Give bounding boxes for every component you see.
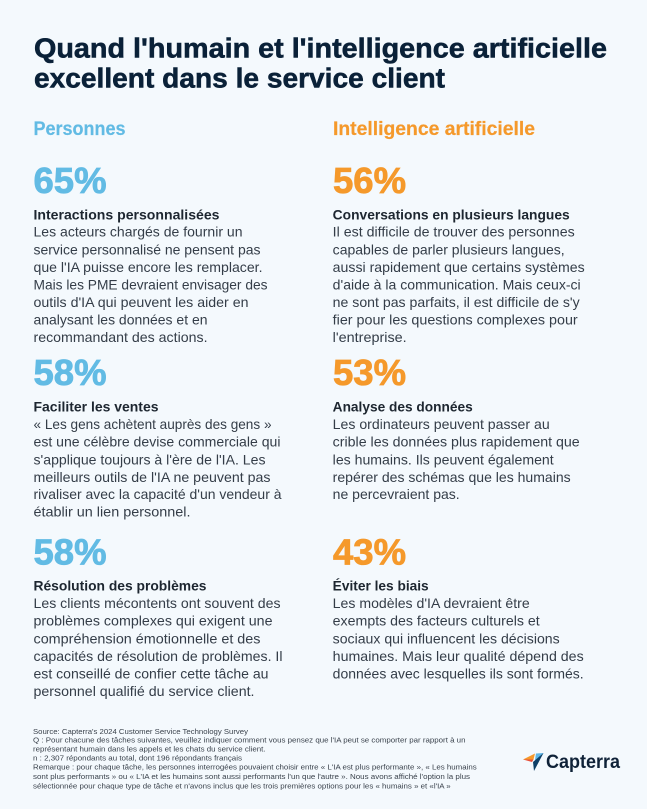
text block: éviter les biais: humaines. Mais leur qualité dépend des bbox=[333, 649, 584, 664]
text block: interactions personnalisées: outils d'IA qui peuvent les aider en bbox=[34, 295, 248, 310]
text block: résolution des problèmes: problèmes complexes qui exigent une bbox=[34, 614, 273, 629]
text block: interactions personnalisées: service personnalisé ne pensent pas bbox=[34, 242, 261, 257]
text block: éviter les biais: données avec lesquelles ils sont formés. bbox=[333, 666, 584, 681]
text block: conversations en plusieurs langues: Il est difficile de trouver des personnes bbox=[333, 225, 575, 240]
text block: interactions personnalisées: que l'IA puisse encore les remplacer. bbox=[34, 260, 262, 275]
panel: faciliter les ventes bbox=[34, 352, 282, 520]
text block: conversations en plusieurs langues: aussi rapidement que certains systèmes bbox=[333, 260, 585, 275]
source notes: Remarque : pour chaque tâche, les personnes interrogées pouvaient choisir entre « L'IA est plus performante », « Les humains bbox=[33, 762, 477, 771]
source notes: Source: Capterra's 2024 Customer Service Technology Survey bbox=[33, 727, 248, 736]
text block: faciliter les ventes: est une célèbre devise commerciale qui bbox=[34, 435, 280, 450]
stat: 53%: 53% bbox=[333, 352, 406, 393]
text block: faciliter les ventes: s'applique toujours à l'ère de l'IA. Les bbox=[34, 452, 266, 467]
logo: Capterra bbox=[523, 752, 620, 773]
source notes bbox=[33, 727, 477, 790]
text block: analyse des données: Les ordinateurs peuvent passer au bbox=[333, 417, 550, 432]
source notes: sont plus performants » ou « L'IA et les humains sont aussi performants l'un que l'autre ». Nous avons affiché l'option la plus bbox=[33, 772, 470, 781]
panel: conversations en plusieurs langues bbox=[333, 160, 585, 345]
panel: éviter les biais bbox=[333, 532, 584, 681]
text block: résolution des problèmes: compréhension émotionnelle et des bbox=[34, 631, 261, 646]
text block: analyse des données: Analyse des données bbox=[333, 399, 473, 414]
wordmark: Capterra bbox=[546, 752, 620, 773]
text block: faciliter les ventes: « Les gens achètent auprès des gens » bbox=[34, 417, 272, 432]
stat: 56%: 56% bbox=[333, 160, 406, 201]
stat: 65%: 65% bbox=[34, 160, 106, 201]
text block: résolution des problèmes: capacités de résolution de problèmes. Il bbox=[34, 649, 282, 664]
column heading: Personnes: Personnes bbox=[34, 119, 126, 140]
source notes: n : 2,307 répondants au total, dont 196 répondants français bbox=[33, 753, 242, 762]
text block: éviter les biais: Les modèles d'IA devraient être bbox=[333, 596, 530, 611]
text block: résolution des problèmes: personnel qualifié du service client. bbox=[34, 684, 254, 699]
text block: éviter les biais bbox=[333, 579, 584, 681]
text block: conversations en plusieurs langues: ne sont pas parfaits, il est difficile de s'y bbox=[333, 295, 580, 310]
text block: éviter les biais: exempts des facteurs culturels et bbox=[333, 614, 540, 629]
text block: conversations en plusieurs langues bbox=[333, 208, 585, 345]
text block: interactions personnalisées: Les acteurs chargés de fournir un bbox=[34, 225, 242, 240]
text block: conversations en plusieurs langues: l'entreprise. bbox=[333, 330, 407, 345]
title bbox=[34, 32, 607, 94]
source notes: sélectionnée pour chaque type de tâche et n'avons inclus que les trois premières options pour les « humains » et «l'IA » bbox=[33, 781, 451, 790]
source notes: Q : Pour chacune des tâches suivantes, veuillez indiquer comment vous pensez que l'IA peut se comporter par rapport à un bbox=[33, 736, 466, 745]
title: Quand l'humain et l'intelligence artificielle bbox=[34, 32, 607, 64]
text block: faciliter les ventes: Faciliter les ventes bbox=[34, 399, 158, 414]
text block: analyse des données: les humains. Ils peuvent également bbox=[333, 452, 554, 467]
text block: analyse des données: ne percevraient pas. bbox=[333, 487, 460, 502]
text block: interactions personnalisées: Interactions personnalisées bbox=[34, 208, 220, 222]
text block: interactions personnalisées: Mais les PME devraient envisager des bbox=[34, 277, 268, 292]
text block: interactions personnalisées: recommandant des actions. bbox=[34, 330, 208, 345]
text block: éviter les biais: sociaux qui influencent les décisions bbox=[333, 631, 560, 646]
stat: 58%: 58% bbox=[34, 532, 106, 572]
text block: conversations en plusieurs langues: Conversations en plusieurs langues bbox=[333, 208, 570, 222]
text block: résolution des problèmes: Résolution des problèmes bbox=[34, 579, 206, 594]
text block: faciliter les ventes: établir un lien personnel. bbox=[34, 505, 190, 520]
text block: analyse des données: crible les données plus rapidement que bbox=[333, 435, 580, 450]
stat: 43%: 43% bbox=[333, 532, 406, 572]
text block: interactions personnalisées: analysant les données et en bbox=[34, 313, 207, 328]
text block: faciliter les ventes bbox=[34, 399, 282, 520]
text block: faciliter les ventes: rivaliser avec la capacité d'un vendeur à bbox=[34, 487, 282, 502]
stat: 58%: 58% bbox=[34, 352, 106, 393]
column heading: Intelligence artificielle: Intelligence artificielle bbox=[333, 119, 535, 140]
panel: interactions personnalisées bbox=[34, 160, 268, 345]
text block: conversations en plusieurs langues: capables de parler plusieurs langues, bbox=[333, 242, 565, 257]
icon: Capterra arrow bbox=[523, 753, 544, 771]
text block: conversations en plusieurs langues: d'aide à la communication. Mais ceux-ci bbox=[333, 277, 581, 292]
text block: éviter les biais: Éviter les biais bbox=[333, 579, 429, 594]
panel: analyse des données bbox=[333, 352, 580, 502]
text block: analyse des données bbox=[333, 399, 580, 502]
text block: résolution des problèmes bbox=[34, 579, 282, 699]
title: excellent dans le service client bbox=[34, 62, 445, 94]
text block: conversations en plusieurs langues: fier pour les questions complexes pour bbox=[333, 313, 578, 328]
text block: interactions personnalisées bbox=[34, 208, 268, 345]
text block: résolution des problèmes: est conseillé de confier cette tâche au bbox=[34, 666, 268, 681]
text block: analyse des données: repérer des schémas que les humains bbox=[333, 470, 571, 485]
source notes: représentant humain dans les appels et les chats du service client. bbox=[33, 745, 266, 754]
panel: résolution des problèmes bbox=[34, 532, 282, 699]
text block: résolution des problèmes: Les clients mécontents ont souvent des bbox=[34, 596, 281, 611]
text block: faciliter les ventes: meilleurs outils de l'IA ne peuvent pas bbox=[34, 470, 271, 485]
